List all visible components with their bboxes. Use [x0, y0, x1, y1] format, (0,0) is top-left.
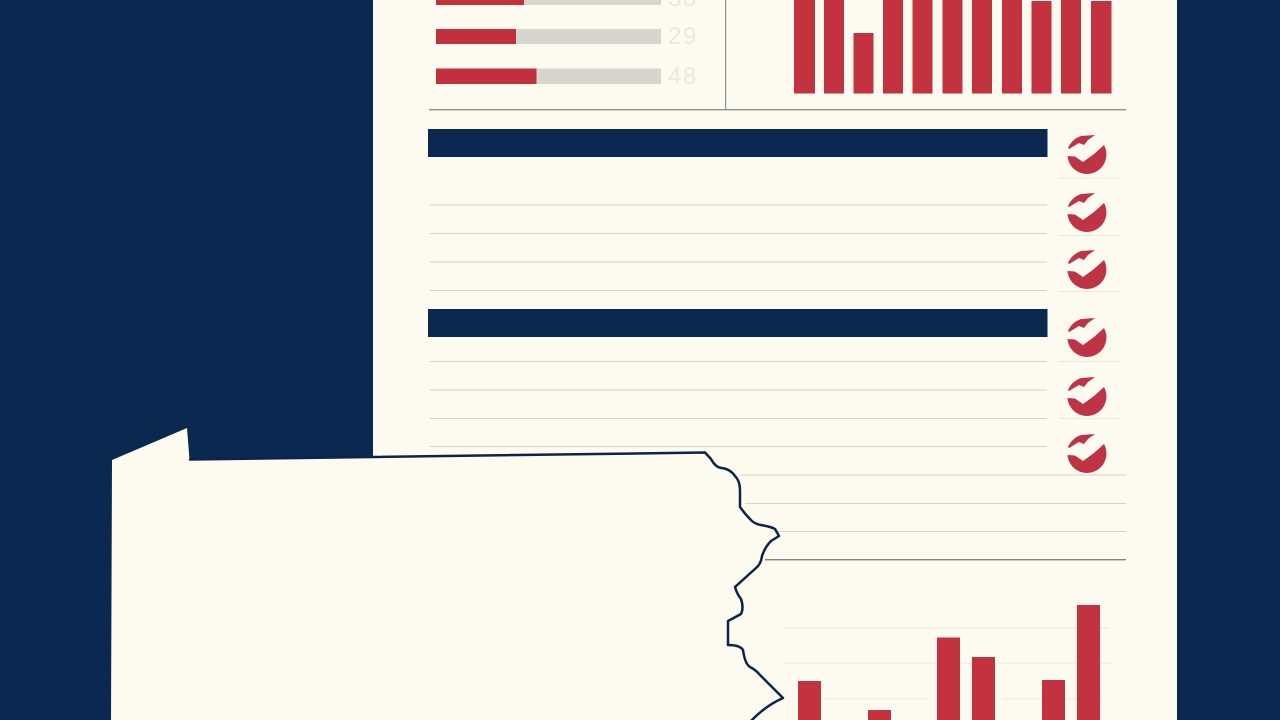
- bar row: 29: 29: [668, 23, 698, 50]
- bar row: 48: 48: [668, 63, 698, 90]
- icon: check badge 4: [1068, 318, 1106, 357]
- section header bar 1: [428, 129, 1048, 157]
- icon: check badge 2: [1068, 193, 1106, 232]
- column chart: top: [794, 0, 1112, 94]
- top panel dividers: [429, 0, 1126, 110]
- icon: check badge 1: [1068, 135, 1106, 174]
- checklist line rules: [1059, 178, 1120, 476]
- horizontal bar chart: [436, 0, 698, 90]
- chart gridlines: [784, 628, 1112, 700]
- column chart: bottom: [784, 605, 1112, 720]
- section 2 text lines: [430, 361, 1126, 532]
- map outline: [190, 452, 783, 720]
- bar row: 48: [436, 63, 698, 90]
- chart columns: [798, 605, 1100, 720]
- icon: check badge 5: [1068, 377, 1106, 416]
- icon: check badge 3: [1068, 250, 1106, 289]
- section 1 text lines: [430, 204, 1047, 291]
- bar row: 38: [436, 0, 698, 12]
- panel: report page: [373, 0, 1177, 720]
- map: state silhouette: [111, 428, 783, 720]
- bar row: 29: [436, 23, 698, 50]
- icon: check badge 6: [1068, 434, 1106, 473]
- section header bar 2: [428, 309, 1048, 337]
- lower panel divider: [765, 559, 1126, 560]
